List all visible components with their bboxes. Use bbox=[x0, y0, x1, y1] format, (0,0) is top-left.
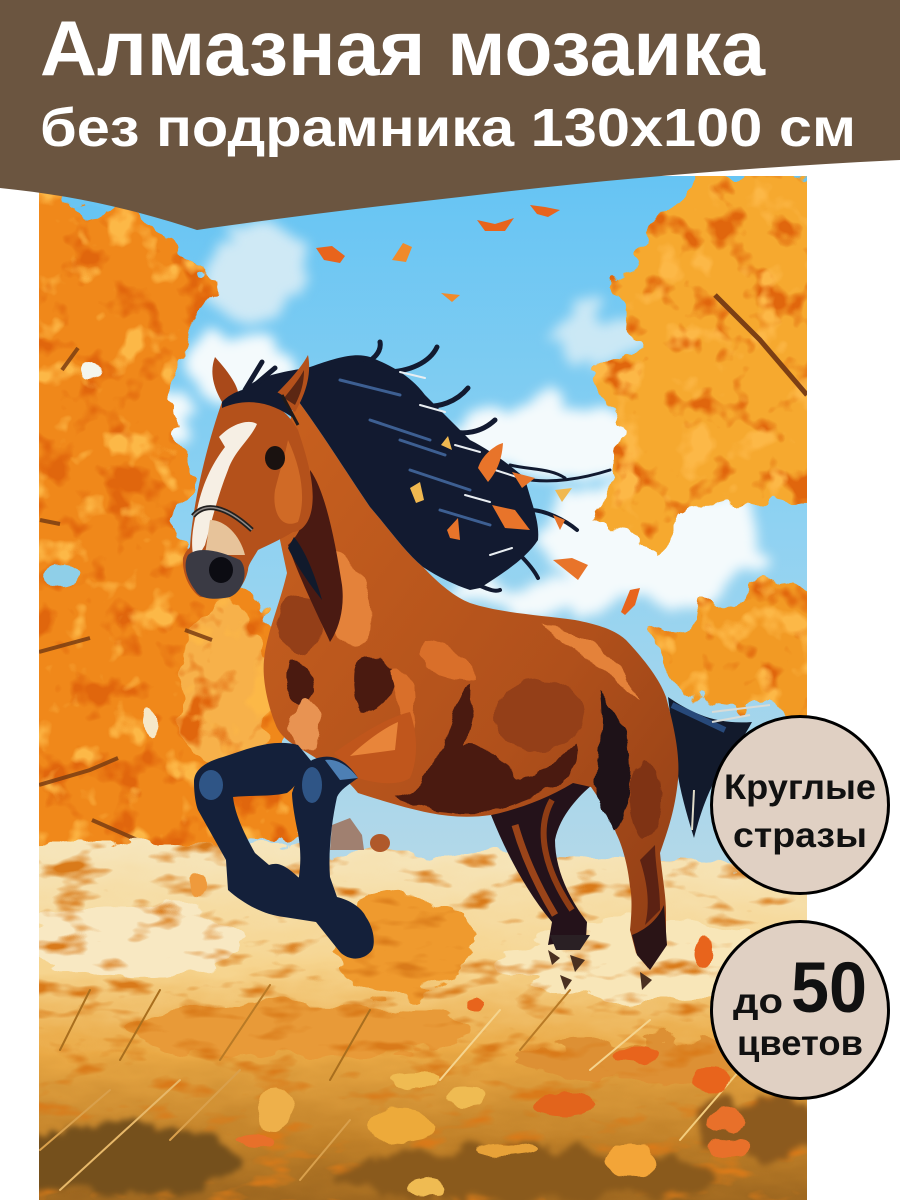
muzzle bbox=[186, 550, 245, 599]
tail bbox=[668, 697, 770, 838]
dirt splashes at hooves bbox=[548, 950, 652, 990]
body dark shading bbox=[285, 657, 630, 830]
nostril bbox=[209, 557, 233, 583]
forelock bbox=[222, 390, 292, 418]
body highlights bbox=[291, 547, 640, 751]
near knee highlight bbox=[302, 767, 322, 803]
mane bbox=[243, 342, 610, 591]
near hind lower leg shadow bbox=[640, 845, 660, 925]
head bbox=[183, 398, 313, 598]
front leg near upper bbox=[342, 712, 416, 783]
clouds bbox=[140, 215, 765, 620]
hoof of near hind leg bbox=[632, 905, 667, 970]
sky bbox=[39, 176, 807, 876]
horse bbox=[183, 342, 770, 970]
body mid shading bbox=[278, 595, 661, 840]
bridle bbox=[193, 508, 252, 530]
far knee highlight bbox=[199, 770, 223, 800]
eye bbox=[265, 446, 285, 470]
foreground leaves bbox=[188, 873, 750, 1198]
falling leaves bbox=[316, 205, 640, 615]
badge: up to 50 colours: цветов bbox=[737, 1024, 863, 1063]
distant shrubs bbox=[330, 818, 364, 850]
badge: up to 50 colours: 50 bbox=[791, 949, 867, 1028]
neck shadow bbox=[288, 470, 343, 642]
forearm highlight bbox=[350, 722, 398, 756]
bottom dark grass bbox=[0, 1096, 820, 1200]
ears bbox=[212, 357, 238, 402]
badge: up to 50 colours bbox=[712, 922, 888, 1098]
badge: round rhinestones bbox=[712, 716, 888, 894]
blaze bbox=[192, 422, 257, 562]
header banner bbox=[0, 0, 900, 230]
grass blades bbox=[40, 985, 740, 1190]
badge: round rhinestones: стразы bbox=[733, 816, 867, 855]
left tree bbox=[39, 192, 298, 847]
subtitle: без подрамника 130х100 см bbox=[40, 98, 856, 158]
front leg near lower bbox=[292, 757, 374, 959]
badge: up to 50 colours: до bbox=[733, 982, 783, 1021]
branches left bbox=[39, 348, 212, 842]
painting: galloping horse in autumn bbox=[39, 176, 807, 1200]
cheek highlight bbox=[274, 440, 302, 524]
body and neck bbox=[264, 398, 678, 968]
pale muzzle bbox=[205, 520, 245, 555]
badge: round rhinestones: Круглые bbox=[724, 768, 876, 807]
title: Алмазная мозаика bbox=[40, 4, 766, 92]
right tree bbox=[590, 176, 807, 718]
far hind leg bbox=[491, 770, 592, 950]
front leg far bbox=[194, 743, 320, 922]
mane leaves bbox=[410, 436, 588, 580]
meadow bbox=[39, 838, 807, 1200]
sky gaps in the left tree bbox=[46, 207, 157, 736]
branch right bbox=[715, 295, 807, 395]
